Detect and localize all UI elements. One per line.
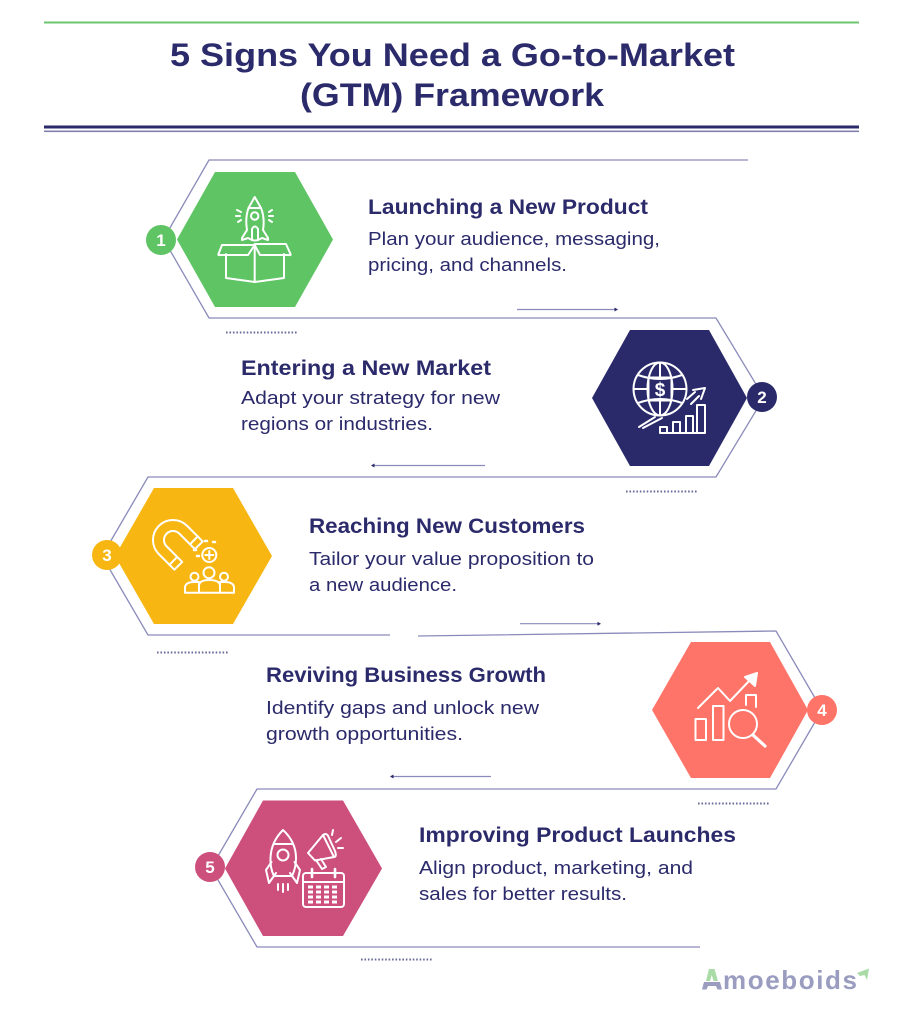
dotted accent	[226, 332, 298, 334]
icon: rocket, megaphone and calendar	[266, 830, 344, 907]
title: 5 Signs You Need a Go-to-Market	[170, 37, 735, 73]
icon: magnet and people	[145, 512, 234, 593]
logo: Amoeboids	[702, 965, 869, 995]
description: Align product, marketing, and	[419, 857, 693, 878]
description: Adapt your strategy for new	[241, 387, 501, 408]
panel: reaching new customers	[92, 477, 594, 652]
title	[170, 37, 735, 113]
description: Tailor your value proposition to	[309, 548, 594, 569]
description: Plan your audience, messaging,	[368, 228, 660, 249]
logo wordmark: moeboids	[723, 965, 857, 995]
title double rule	[44, 126, 859, 132]
description	[241, 387, 501, 434]
panel outline	[300, 318, 764, 477]
green hexagon	[177, 172, 333, 307]
logo letter A top	[706, 969, 718, 981]
yellow hexagon	[115, 488, 272, 624]
number badge 2	[747, 382, 777, 412]
panel: improving product launches	[195, 789, 736, 960]
number badge 3: 3	[102, 546, 112, 565]
panel: launching a new product	[146, 160, 748, 332]
icon: globe and growth chart	[634, 362, 705, 433]
dollar sign: $	[655, 380, 666, 401]
description: Identify gaps and unlock new	[266, 697, 540, 718]
top green rule	[44, 22, 859, 24]
dotted accent	[157, 652, 228, 654]
navy hexagon	[592, 330, 747, 466]
heading: Reviving Business Growth	[266, 663, 546, 687]
dotted accent	[361, 958, 432, 960]
panel outline	[102, 477, 390, 635]
number badge 3	[92, 540, 122, 570]
description: sales for better results.	[419, 883, 627, 904]
heading: Launching a New Product	[368, 195, 648, 219]
logo letter A base	[702, 982, 722, 990]
number badge 4	[807, 695, 837, 725]
number badge 5: 5	[205, 858, 215, 877]
number badge 5	[195, 852, 225, 882]
description	[266, 697, 540, 744]
description	[309, 548, 594, 595]
number badge 4: 4	[817, 701, 827, 720]
arrow: right	[520, 622, 601, 626]
heading: Improving Product Launches	[419, 823, 736, 847]
number badge 1	[146, 225, 176, 255]
description: regions or industries.	[241, 413, 433, 434]
arrow: right	[517, 308, 618, 312]
heading: Reaching New Customers	[309, 514, 585, 538]
description: a new audience.	[309, 574, 457, 595]
coral hexagon	[652, 642, 808, 778]
panel outline	[164, 160, 748, 318]
dotted accent	[698, 802, 769, 804]
icon: rocket and box	[218, 197, 291, 282]
title: (GTM) Framework	[300, 77, 604, 113]
arrow: left	[371, 464, 485, 468]
icon: chart and magnifier	[696, 673, 765, 746]
pink hexagon	[225, 800, 382, 936]
description	[419, 857, 693, 904]
dotted accent	[626, 490, 697, 492]
heading: Entering a New Market	[241, 356, 491, 380]
number badge 2: 2	[757, 388, 767, 407]
number badge 1: 1	[156, 231, 166, 250]
panel outline	[418, 631, 822, 789]
panel: reviving business growth	[266, 631, 837, 804]
description: growth opportunities.	[266, 723, 463, 744]
logo arrow	[857, 968, 869, 980]
description	[368, 228, 660, 275]
panel: entering a new market	[241, 318, 777, 492]
arrow: left	[390, 774, 491, 778]
description: pricing, and channels.	[368, 254, 567, 275]
panel outline	[211, 789, 700, 947]
